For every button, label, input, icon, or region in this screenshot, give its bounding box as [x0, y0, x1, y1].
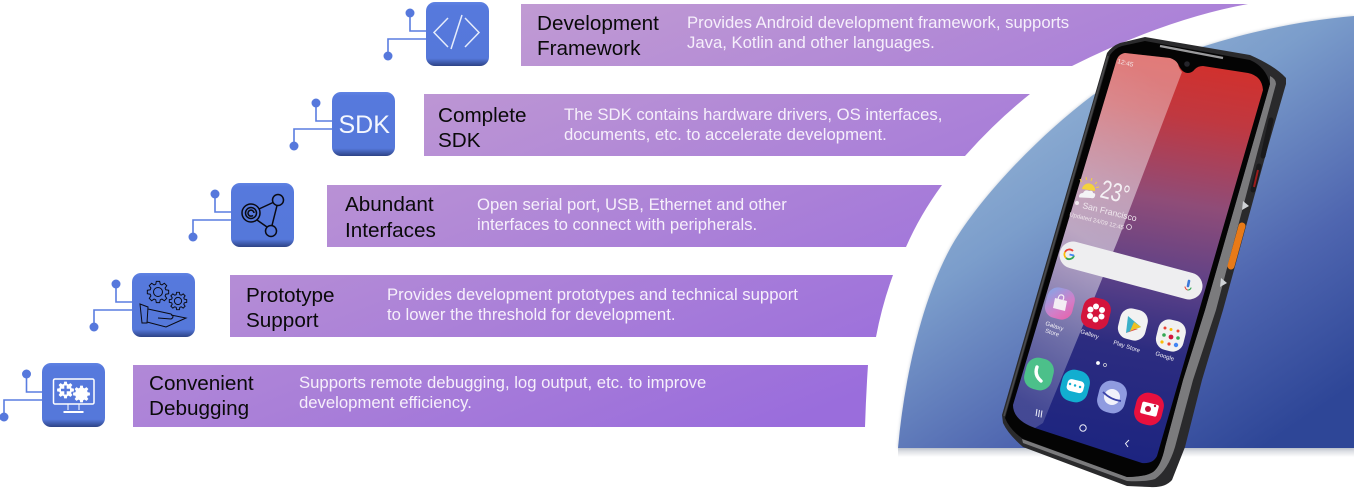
description: prototype support: to lower the threshold for development.	[387, 305, 676, 324]
screen sheen	[1013, 53, 1182, 428]
metal side strip	[1022, 76, 1276, 481]
icon: sdk: SDK	[338, 111, 390, 139]
camera	[1184, 61, 1190, 67]
description: complete sdk: The SDK contains hardware drivers, OS interfaces,	[564, 105, 942, 124]
app: google: Google	[1154, 351, 1175, 363]
app: gallery: Gallery	[1079, 329, 1099, 341]
banner: development framework	[521, 4, 1248, 66]
side arrow marks	[1220, 201, 1249, 287]
side buttons	[1253, 120, 1271, 190]
heading: abundant interfaces: Interfaces	[345, 219, 436, 242]
phone body	[1002, 37, 1286, 487]
heading: convenient debugging: Convenient	[149, 372, 254, 395]
page dots	[1096, 361, 1106, 366]
heading: convenient debugging: Debugging	[149, 397, 249, 420]
heading: prototype support: Support	[246, 309, 319, 332]
app: play store: Play Store	[1112, 340, 1141, 355]
left edge highlight	[1004, 56, 1108, 416]
app: google	[1154, 317, 1188, 363]
blue curved background	[898, 16, 1354, 457]
description: development framework: Java, Kotlin and other languages.	[687, 33, 935, 52]
heading: development framework: Framework	[537, 37, 641, 60]
icon: monitor with gears	[42, 363, 105, 427]
description: convenient debugging: Supports remote debugging, log output, etc. to improve	[299, 373, 706, 392]
weather icon	[1079, 177, 1099, 198]
heading: development framework: Development	[537, 12, 659, 35]
phone	[1002, 37, 1286, 487]
row 1: development framework	[384, 2, 1248, 66]
description: development framework: Provides Android development framework, supports	[687, 13, 1069, 32]
heading: complete sdk: SDK	[438, 129, 481, 152]
row 5: convenient debugging	[0, 363, 868, 427]
banner: complete sdk	[424, 94, 1030, 156]
orange button	[1231, 226, 1242, 266]
row 3: abundant interfaces	[188, 183, 942, 247]
row 4: prototype support	[90, 273, 893, 337]
description: abundant interfaces: Open serial port, USB, Ethernet and other	[477, 195, 787, 214]
app: play store	[1112, 306, 1150, 355]
app: phone	[1022, 355, 1056, 393]
description: complete sdk: documents, etc. to accelerate development.	[564, 125, 887, 144]
banner: abundant interfaces	[327, 185, 942, 247]
app: gallery	[1079, 295, 1113, 341]
location pin	[1075, 201, 1079, 205]
description: abundant interfaces: interfaces to connect with peripherals.	[477, 215, 757, 234]
heading: complete sdk: Complete	[438, 104, 527, 127]
connector lines	[0, 370, 42, 422]
app: galaxy store: Galaxy	[1044, 321, 1064, 333]
icon: gears on hand	[132, 273, 195, 337]
banner: convenient debugging	[133, 365, 868, 427]
search bar	[1073, 255, 1189, 286]
app: internet	[1095, 378, 1129, 416]
google logo	[1064, 249, 1074, 259]
updated time: Updated 24/09 12:45	[1069, 212, 1125, 232]
connector lines	[188, 190, 231, 242]
red side button	[1254, 170, 1258, 187]
connector lines	[384, 8, 426, 60]
speaker	[1160, 46, 1223, 58]
connector lines	[90, 280, 132, 332]
description: prototype support: Provides development prototypes and technical support	[387, 285, 798, 304]
status clock: 12:45	[1117, 58, 1134, 69]
app: messages	[1058, 367, 1092, 405]
icon: sdk	[332, 92, 395, 156]
black bezel	[1005, 41, 1270, 477]
app: galaxy store: Store	[1044, 328, 1060, 339]
microphone	[1185, 281, 1191, 290]
city: San Francisco	[1082, 200, 1138, 223]
temperature: 23°	[1098, 174, 1133, 210]
app: galaxy store	[1042, 285, 1077, 339]
navigation buttons	[1036, 409, 1129, 447]
screen	[1013, 53, 1263, 463]
description: convenient debugging: development efficiency.	[299, 393, 472, 412]
icon: network nodes	[231, 183, 294, 247]
icon: code brackets	[426, 2, 489, 66]
heading: abundant interfaces: Abundant	[345, 193, 434, 216]
refresh icon	[1126, 224, 1132, 230]
app: camera	[1132, 390, 1166, 428]
heading: prototype support: Prototype	[246, 284, 335, 307]
banner: prototype support	[230, 275, 893, 337]
row 2: complete sdk	[290, 92, 1030, 156]
connector lines	[290, 98, 332, 150]
